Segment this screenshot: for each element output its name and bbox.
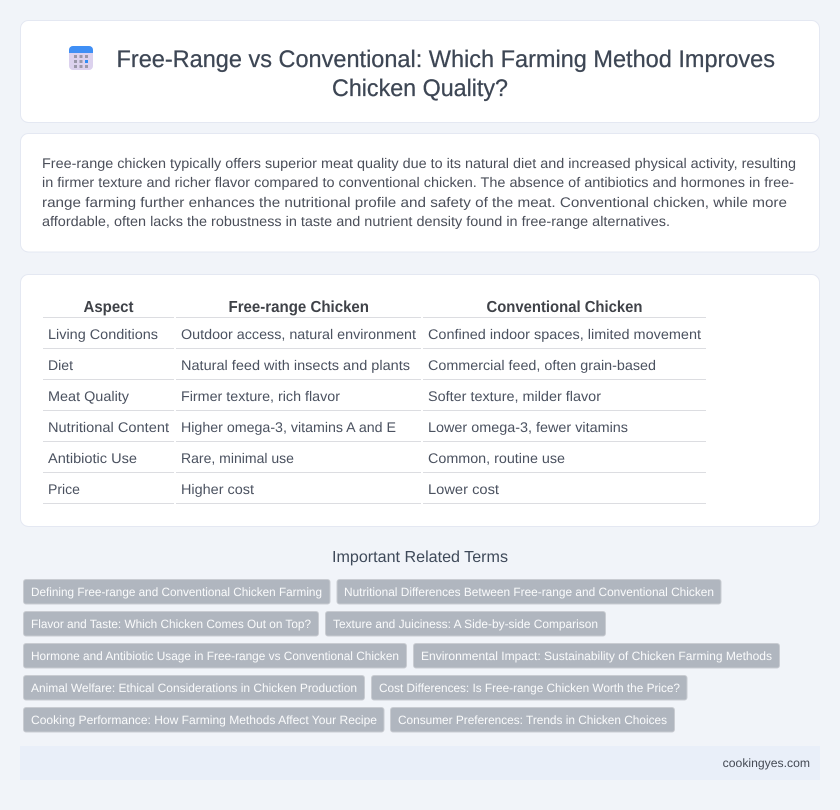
- title: Chicken Quality?: [332, 75, 508, 102]
- tag: cost differences: Cost Differences: Is Free-range Chicken Worth the Price?: [379, 681, 680, 695]
- footer: cookingyes.com: [723, 756, 810, 770]
- row: antibiotic use: Antibiotic Use: [48, 450, 137, 466]
- tag: consumer preferences: [390, 708, 674, 732]
- row: price: Higher cost: [181, 481, 254, 497]
- row: nutritional content: Lower omega-3, fewer vitamins: [428, 419, 628, 435]
- tag: nutritional differences: Nutritional Differences Between Free-range and Conventional Chicken: [344, 585, 714, 599]
- row: antibiotic use: [48, 450, 565, 466]
- tag: defining: Defining Free-range and Conventional Chicken Farming: [31, 585, 322, 599]
- row: living conditions: Living Conditions: [48, 326, 158, 342]
- tag: environmental impact: [414, 644, 780, 668]
- row: meat quality: Softer texture, milder flavor: [428, 388, 601, 404]
- text block: intro: affordable, often lacks the robustness in taste and nutrient density found in free-range alternatives.: [42, 213, 670, 229]
- row: meat quality: Meat Quality: [48, 388, 129, 404]
- row: antibiotic use: Common, routine use: [428, 450, 565, 466]
- tag: texture and juiciness: Texture and Juiciness: A Side-by-side Comparison: [333, 617, 598, 631]
- tag: consumer preferences: Consumer Preferences: Trends in Chicken Choices: [398, 713, 667, 727]
- title: Free-Range vs Conventional: Which Farming Method Improves: [116, 46, 775, 73]
- row: diet: Diet: [48, 357, 73, 373]
- tag: hormone and antibiotic: [24, 644, 406, 668]
- row: living conditions: Outdoor access, natural environment: [181, 326, 416, 342]
- panel: header: [20, 20, 820, 122]
- table header row: Conventional Chicken: [486, 299, 642, 316]
- table header row: [84, 299, 642, 316]
- tag: animal welfare: Animal Welfare: Ethical Considerations in Chicken Production: [31, 681, 357, 695]
- footer: [20, 746, 820, 780]
- tag cloud: related terms: [24, 580, 780, 732]
- row: price: Price: [48, 481, 80, 497]
- tag: texture and juiciness: [326, 612, 606, 636]
- row: antibiotic use: Rare, minimal use: [181, 450, 294, 466]
- text block: intro: Free-range chicken typically offers superior meat quality due to its natural diet and increased physical activity, resulting: [42, 155, 796, 171]
- table header row: Aspect: [84, 299, 134, 316]
- tag: cost differences: [372, 676, 687, 700]
- row: meat quality: Firmer texture, rich flavor: [181, 388, 340, 404]
- tag: cooking performance: Cooking Performance: How Farming Methods Affect Your Recipe: [31, 713, 377, 727]
- panel: intro paragraph: [20, 134, 820, 252]
- tag: defining: [24, 580, 330, 604]
- row: nutritional content: Nutritional Content: [48, 419, 169, 435]
- row: nutritional content: [48, 419, 628, 435]
- row: nutritional content: Higher omega-3, vitamins A and E: [181, 419, 396, 435]
- tag: flavor and taste: Flavor and Taste: Which Chicken Comes Out on Top?: [31, 617, 311, 631]
- row: meat quality: [48, 388, 601, 404]
- tag: hormone and antibiotic: Hormone and Antibiotic Usage in Free-range vs Conventional Chicken: [31, 649, 399, 663]
- row: diet: Natural feed with insects and plants: [181, 357, 410, 373]
- tag: cooking performance: [24, 708, 384, 732]
- row: diet: [48, 357, 656, 373]
- text block: intro: in firmer texture and richer flavor compared to conventional chicken. The absence of antibiotics and hormones in free-: [42, 174, 794, 190]
- text block: intro: [42, 155, 796, 229]
- row: price: Lower cost: [428, 481, 499, 497]
- row: living conditions: Confined indoor spaces, limited movement: [428, 326, 701, 342]
- tag: flavor and taste: [24, 612, 318, 636]
- tag: animal welfare: [24, 676, 364, 700]
- tag: nutritional differences: [337, 580, 721, 604]
- heading: important related terms: Important Related Terms: [332, 549, 508, 566]
- icon: calendar: [69, 46, 93, 70]
- panel: comparison table: [20, 274, 820, 526]
- row: living conditions: [48, 326, 701, 342]
- title: [116, 46, 775, 102]
- row: diet: Commercial feed, often grain-based: [428, 357, 656, 373]
- table header row: Free-range Chicken: [228, 299, 369, 316]
- text block: intro: range farming further enhances the nutritional profile and safety of the meat. Conventional chicken, while more: [42, 194, 787, 210]
- tag: environmental impact: Environmental Impact: Sustainability of Chicken Farming Methods: [421, 649, 772, 663]
- row: price: [48, 481, 499, 497]
